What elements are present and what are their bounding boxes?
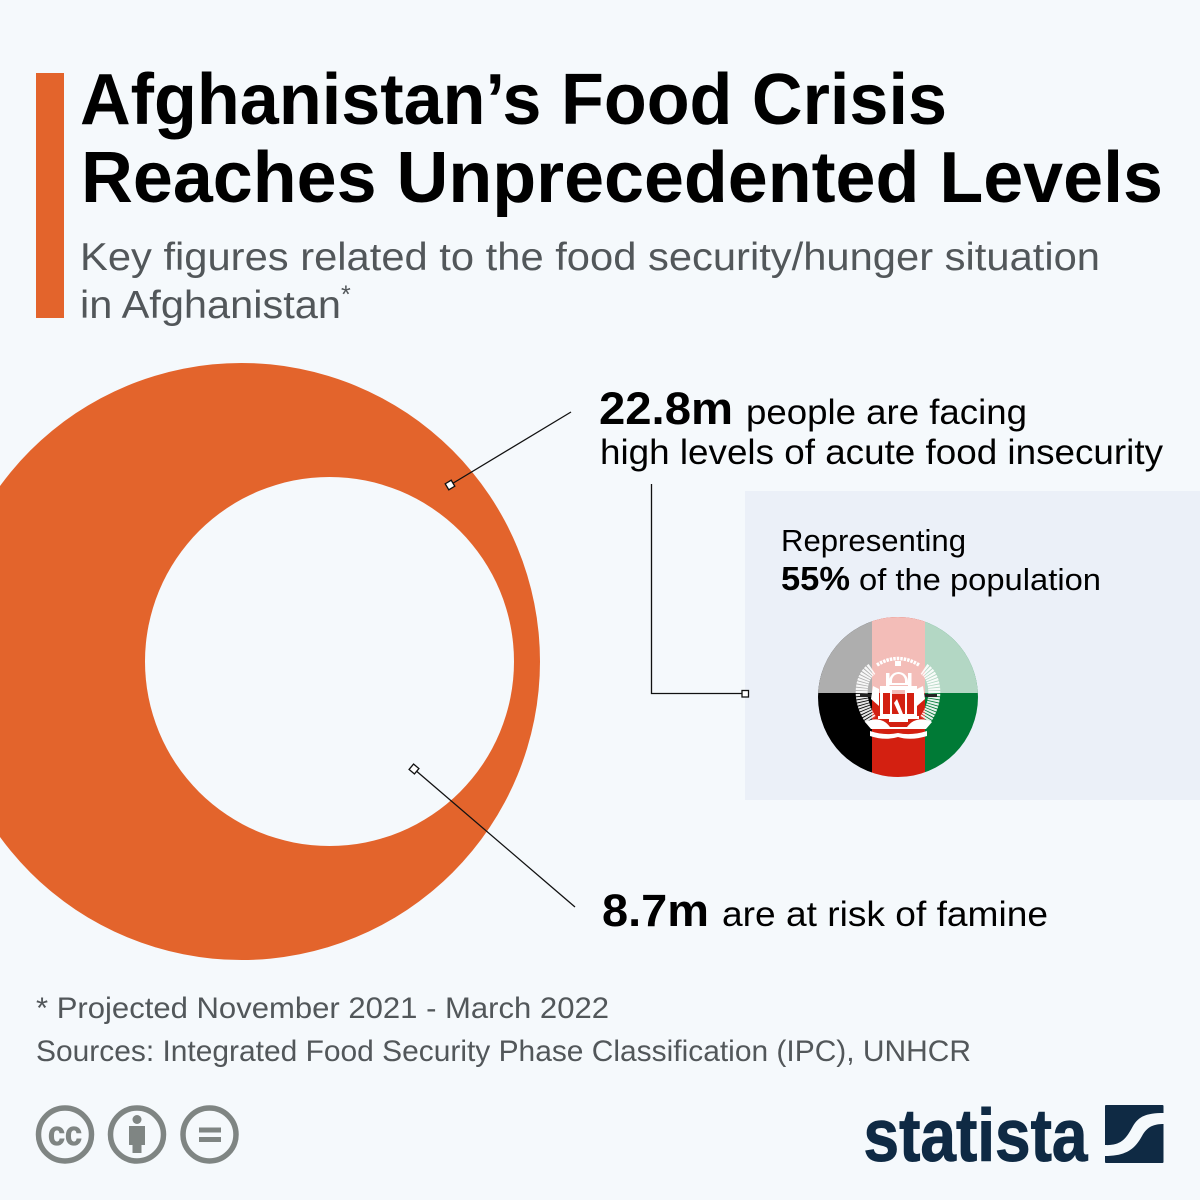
- donut chart: [0, 363, 540, 960]
- statista wordmark: statista: [864, 1094, 1088, 1177]
- icon: attribution: [110, 1108, 164, 1161]
- callout: 8.7m: [602, 885, 1048, 936]
- panel text: Representing: [781, 524, 966, 558]
- icon: no derivatives: [183, 1108, 236, 1161]
- leader line: 8.7m to ring: [409, 764, 575, 907]
- subtitle: [80, 236, 1100, 327]
- subtitle: *: [341, 281, 351, 309]
- emblem wreath: [862, 658, 934, 720]
- footnote and sources: * Projected November 2021 - March 2022: [36, 992, 609, 1025]
- icon: flag emblem: [860, 658, 937, 739]
- callout: 22.8m: high levels of acute food insecurity: [600, 433, 1164, 472]
- panel text: of the population: [859, 563, 1101, 597]
- icon: creative commons: cc: [48, 1115, 82, 1153]
- subtitle: in Afghanistan: [80, 284, 341, 327]
- callout: 22.8m: people are facing: [746, 393, 1027, 432]
- footnote and sources: Sources: Integrated Food Security Phase Classification (IPC), UNHCR: [36, 1035, 971, 1068]
- leader line: 22.8m to ring: [445, 412, 571, 490]
- accent bar: [36, 73, 64, 318]
- panel text: [781, 524, 1101, 597]
- icon: Afghan flag: [818, 617, 978, 777]
- statista logo mark: [1105, 1105, 1164, 1163]
- panel text: 55%: [781, 560, 850, 597]
- footnote and sources: [36, 992, 971, 1068]
- leader line: 22.8m to panel: [652, 484, 748, 697]
- title: Afghanistan’s Food Crisis: [80, 60, 947, 140]
- callout: 8.7m: 8.7m: [602, 885, 709, 936]
- callout: 22.8m: [599, 383, 1164, 472]
- icon: creative commons: [38, 1108, 92, 1161]
- panel: population share: [745, 491, 1200, 800]
- title: Reaches Unprecedented Levels: [81, 138, 1163, 218]
- callout: 8.7m: are at risk of famine: [722, 895, 1048, 934]
- callout: 22.8m: 22.8m: [599, 383, 733, 434]
- title: [80, 60, 1163, 218]
- subtitle: Key figures related to the food security/hunger situation: [80, 236, 1100, 279]
